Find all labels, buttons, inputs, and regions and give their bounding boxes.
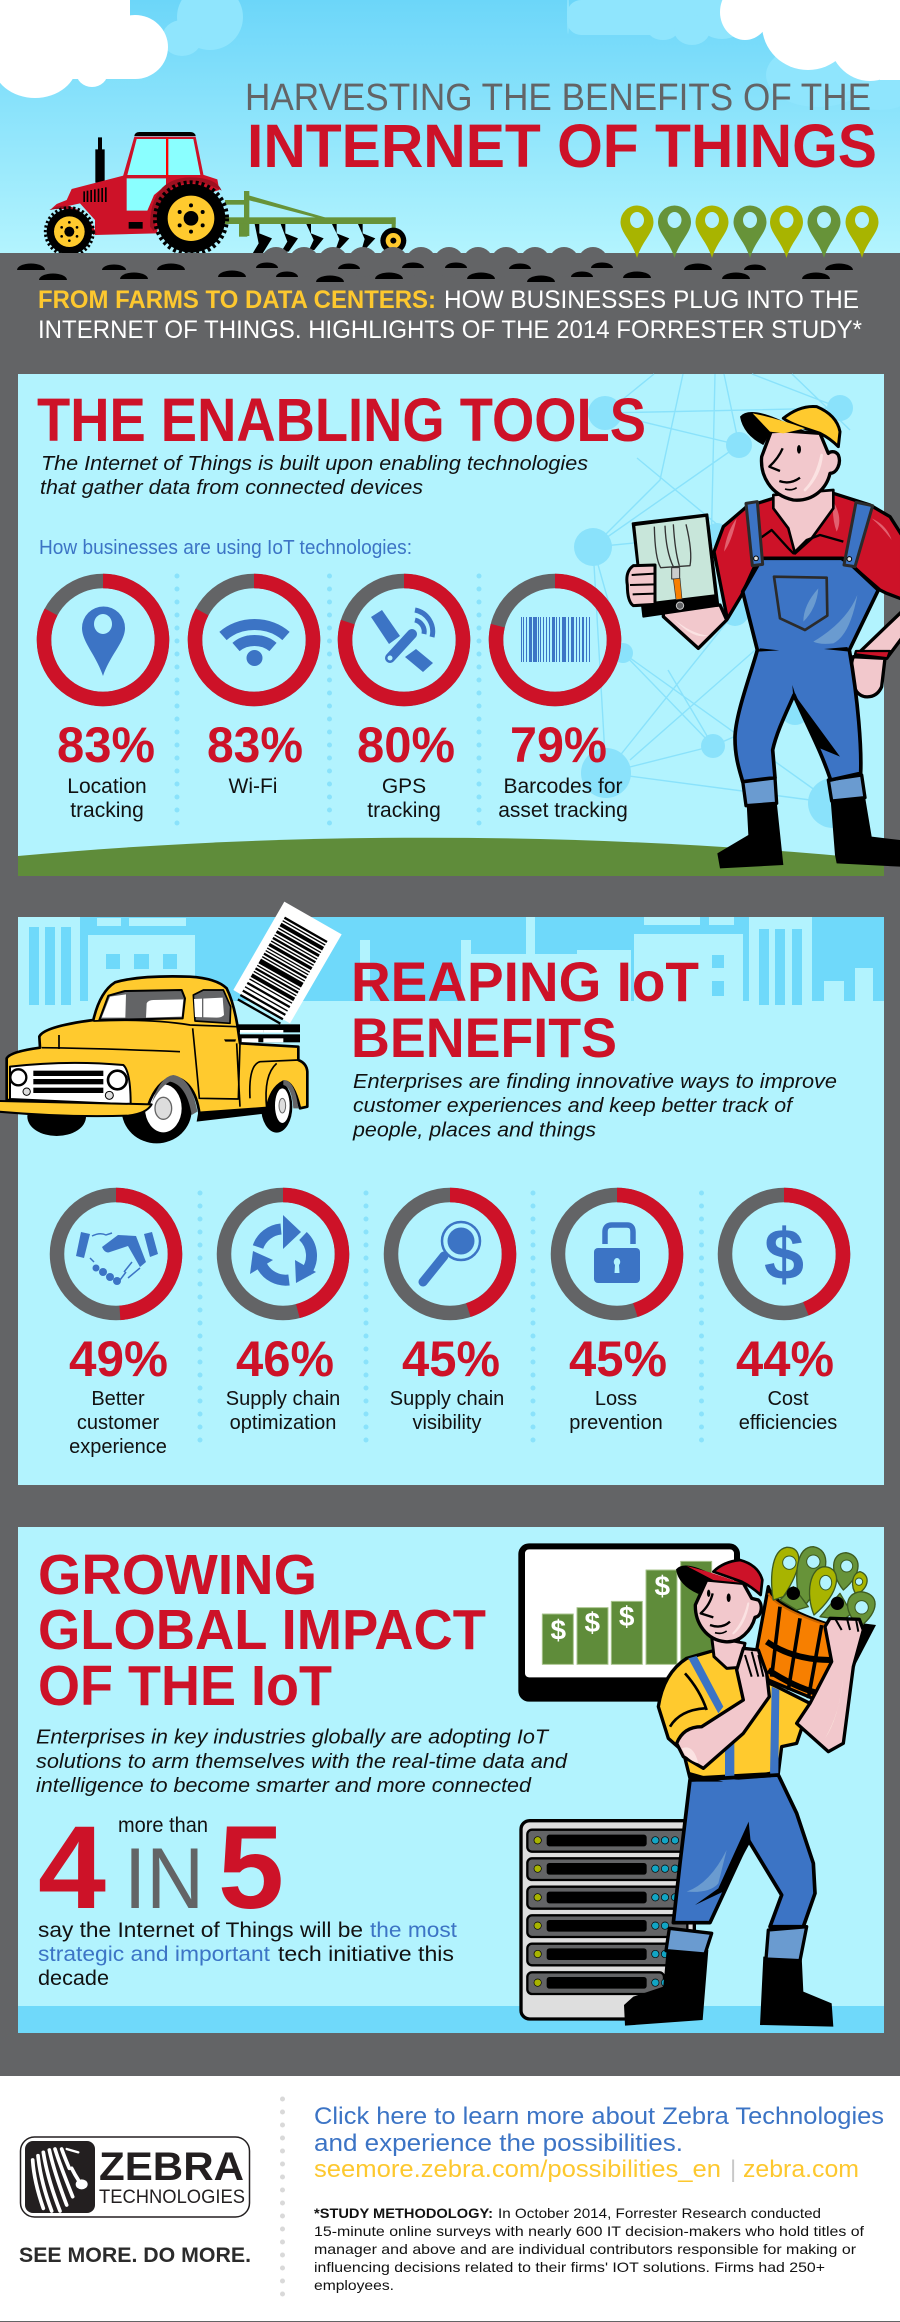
monitor with bar chart: $ xyxy=(585,1607,601,1638)
stat: better customer experience 49%: customer xyxy=(77,1412,159,1434)
stat: cost efficiencies 44%: 44% xyxy=(736,1331,834,1387)
intro text: The Internet of Things is built upon enabling technologies xyxy=(41,453,588,475)
stat: gps tracking 80%: tracking xyxy=(367,799,441,822)
stat: 4 in 5 xyxy=(38,1802,284,1934)
stat: gps tracking 80% xyxy=(345,581,463,822)
stat: supply chain visibility 45%: 45% xyxy=(402,1331,500,1387)
body xyxy=(50,175,219,235)
neck xyxy=(712,1637,745,1668)
boots xyxy=(624,1950,833,2027)
trousers xyxy=(673,1775,815,1927)
footer xyxy=(0,2076,900,2321)
intro subtitle: FROM FARMS TO DATA CENTERS: xyxy=(38,286,436,314)
header: sky xyxy=(0,0,900,254)
heading: OF THE IoT xyxy=(38,1654,332,1718)
stat: barcodes 79%: 79% xyxy=(510,717,607,773)
intro text: that gather data from connected devices xyxy=(40,477,423,499)
call to action: zebra.com xyxy=(743,2156,859,2183)
plow xyxy=(225,191,406,254)
stat: loss prevention 45%: 45% xyxy=(569,1331,667,1387)
grass xyxy=(18,838,884,876)
windows xyxy=(99,990,185,1020)
dotted separators xyxy=(200,1193,702,1442)
icon: handshake xyxy=(76,1232,158,1285)
stat: better customer experience 49%: experience xyxy=(69,1436,167,1458)
head xyxy=(695,1580,761,1642)
stat caption: strategic and important xyxy=(38,1943,270,1966)
server rack xyxy=(521,1821,694,2019)
logo: zebra technologies: ZEBRA xyxy=(99,2145,244,2189)
stat caption: say the Internet of Things will be xyxy=(38,1919,363,1942)
intro subtitle xyxy=(38,286,862,344)
illustration: barcode tag xyxy=(233,902,342,1025)
chart caption: How businesses are using IoT technologies: xyxy=(39,537,412,559)
study methodology: *STUDY METHODOLOGY: xyxy=(314,2205,493,2221)
icon: dollar sign: $ xyxy=(764,1215,804,1295)
heading: THE ENABLING TOOLS xyxy=(37,386,646,454)
study methodology: In October 2014, Forrester Research conducted xyxy=(498,2205,821,2221)
heading xyxy=(351,950,699,1069)
illustration: farmer holding tablet xyxy=(627,406,900,868)
call to action: | xyxy=(730,2156,736,2183)
cap xyxy=(676,1566,737,1594)
illustration: farmer with monitor, server and basket xyxy=(518,1543,876,2027)
stat: loss prevention 45% xyxy=(558,1195,676,1434)
icon: padlock xyxy=(594,1225,640,1283)
cap xyxy=(740,412,807,445)
icon: magnifier xyxy=(423,1222,480,1282)
stat: location tracking 83% xyxy=(44,581,162,822)
stat: loss prevention 45%: Loss xyxy=(595,1388,637,1410)
stat: supply chain optimization 46%: Supply chain xyxy=(226,1388,340,1410)
stat: supply chain optimization 46%: optimization xyxy=(230,1412,336,1434)
stat: supply chain visibility 45%: Supply chain xyxy=(390,1388,504,1410)
icon: zebra head xyxy=(33,2149,88,2211)
cab xyxy=(123,137,204,177)
grille xyxy=(10,1063,131,1104)
study methodology: employees. xyxy=(314,2277,394,2293)
study methodology: manager and above and are individual contributors responsible for making or xyxy=(314,2241,856,2257)
monitor with bar chart: $ xyxy=(619,1601,635,1632)
stat: supply chain visibility 45% xyxy=(390,1195,509,1434)
right arm xyxy=(851,612,900,697)
stat caption xyxy=(38,1919,457,1990)
bumper xyxy=(0,1101,152,1116)
stat: location tracking 83%: tracking xyxy=(70,799,144,822)
boots xyxy=(717,797,900,868)
stat: barcodes 79%: Barcodes for xyxy=(503,775,623,798)
body xyxy=(7,976,307,1118)
tablet xyxy=(633,514,718,617)
intro subtitle: INTERNET OF THINGS. HIGHLIGHTS OF THE 2014 FORRESTER STUDY* xyxy=(38,316,862,344)
panel: reaping iot benefits xyxy=(0,902,884,1485)
stat: 4 in 5: more than xyxy=(118,1814,208,1837)
heading: GROWING xyxy=(38,1543,317,1607)
exhaust xyxy=(95,137,105,183)
stat: location tracking 83%: Location xyxy=(67,775,147,798)
stat caption: decade xyxy=(38,1967,109,1990)
stat: 4 in 5: 4 xyxy=(38,1802,106,1934)
stat: gps tracking 80%: GPS xyxy=(382,775,426,798)
heading: GLOBAL IMPACT xyxy=(38,1598,486,1662)
title xyxy=(245,77,877,180)
stat: location tracking 83%: 83% xyxy=(57,717,155,773)
intro text xyxy=(352,1071,837,1142)
stat: cost efficiencies 44%: efficiencies xyxy=(739,1412,837,1434)
icon: satellite xyxy=(371,610,433,672)
truck bed rails xyxy=(235,1024,300,1042)
intro text: intelligence to become smarter and more connected xyxy=(36,1775,532,1797)
intro text: customer experiences and keep better track of xyxy=(353,1095,795,1117)
ground xyxy=(0,247,900,374)
stat caption: tech initiative this xyxy=(278,1943,454,1966)
fist xyxy=(627,565,655,606)
stat: better customer experience 49%: 49% xyxy=(69,1331,168,1387)
stat: wi-fi 83% xyxy=(195,581,313,798)
skyline xyxy=(18,917,884,1005)
stat: better customer experience 49% xyxy=(57,1195,175,1458)
study methodology: 15-minute online surveys with nearly 600 IT decision-makers who hold titles of xyxy=(314,2223,864,2239)
call to action: and experience the possibilities. xyxy=(314,2130,683,2157)
forearm xyxy=(663,605,727,648)
pitchfork on tablet xyxy=(654,524,691,568)
basket arm back xyxy=(843,1623,876,1668)
intro text xyxy=(40,453,588,499)
illustration: tractor with plow xyxy=(45,132,406,256)
shirt xyxy=(714,493,900,619)
illustration: yellow truck xyxy=(0,976,307,1143)
icon: location pin xyxy=(82,606,125,676)
stat: supply chain optimization 46% xyxy=(224,1195,342,1434)
study methodology xyxy=(314,2205,864,2293)
wheels xyxy=(27,1077,292,1143)
heading: BENEFITS xyxy=(351,1006,617,1069)
stat: cost efficiencies 44% xyxy=(725,1195,843,1434)
straps xyxy=(746,502,873,567)
pins in bucket xyxy=(772,1547,875,1627)
intro text: people, places and things xyxy=(352,1120,596,1142)
title: INTERNET OF THINGS xyxy=(247,112,877,180)
stat: barcodes 79% xyxy=(496,581,628,822)
logo: zebra technologies: TECHNOLOGIES xyxy=(99,2187,245,2208)
shirt xyxy=(658,1651,810,1778)
straps xyxy=(688,1656,779,1782)
panel: the enabling tools xyxy=(18,374,884,876)
intro text: Enterprises in key industries globally are adopting IoT xyxy=(36,1726,550,1748)
intro text: Enterprises are finding innovative ways to improve xyxy=(353,1071,837,1093)
heading: REAPING IoT xyxy=(351,950,699,1013)
network background xyxy=(574,374,858,828)
icon: wi-fi xyxy=(223,625,286,661)
dotted separators xyxy=(177,576,479,826)
tagline: SEE MORE. DO MORE. xyxy=(19,2244,251,2267)
stat: barcodes 79%: asset tracking xyxy=(498,799,628,822)
call to action xyxy=(314,2103,884,2183)
stat: supply chain visibility 45%: visibility xyxy=(413,1412,481,1434)
stat: wi-fi 83%: 83% xyxy=(207,717,303,773)
pocket xyxy=(774,577,827,630)
wheels xyxy=(150,177,222,232)
stat: 4 in 5: IN xyxy=(124,1831,204,1927)
icon: barcode xyxy=(521,617,590,662)
bucket xyxy=(757,1587,832,1700)
monitor with bar chart: $ xyxy=(655,1571,671,1602)
stat: cost efficiencies 44%: Cost xyxy=(767,1388,809,1410)
icon: circular arrows xyxy=(250,1215,316,1283)
neck xyxy=(773,490,833,553)
monitor with bar chart xyxy=(518,1543,740,1702)
left arm xyxy=(677,1648,769,1768)
stat: 4 in 5: 5 xyxy=(218,1802,284,1934)
clouds xyxy=(0,0,900,110)
stat: supply chain optimization 46%: 46% xyxy=(236,1331,334,1387)
intro text: solutions to arm themselves with the real-time data and xyxy=(36,1751,568,1773)
stat: loss prevention 45%: prevention xyxy=(569,1412,663,1434)
right arm xyxy=(797,1618,863,1752)
logo: zebra technologies xyxy=(20,2137,250,2217)
heading xyxy=(38,1543,486,1718)
monitor with bar chart: $ xyxy=(551,1614,567,1645)
stat: better customer experience 49%: Better xyxy=(91,1388,145,1410)
intro subtitle: HOW BUSINESSES PLUG INTO THE xyxy=(444,286,859,314)
panel: growing global impact xyxy=(18,1527,884,2033)
stat: wi-fi 83%: Wi-Fi xyxy=(229,775,277,798)
study methodology: influencing decisions related to their firms' IOT solutions. Firms had 250+ xyxy=(314,2259,825,2275)
head xyxy=(761,430,839,500)
overalls xyxy=(735,558,878,782)
call to action: Click here to learn more about Zebra Technologies xyxy=(314,2103,884,2130)
stat caption: the most xyxy=(370,1919,457,1942)
location pins row xyxy=(620,206,878,258)
stat: gps tracking 80%: 80% xyxy=(357,717,455,773)
intro text xyxy=(36,1726,568,1797)
call to action: seemore.zebra.com/possibilities_en xyxy=(314,2156,721,2183)
